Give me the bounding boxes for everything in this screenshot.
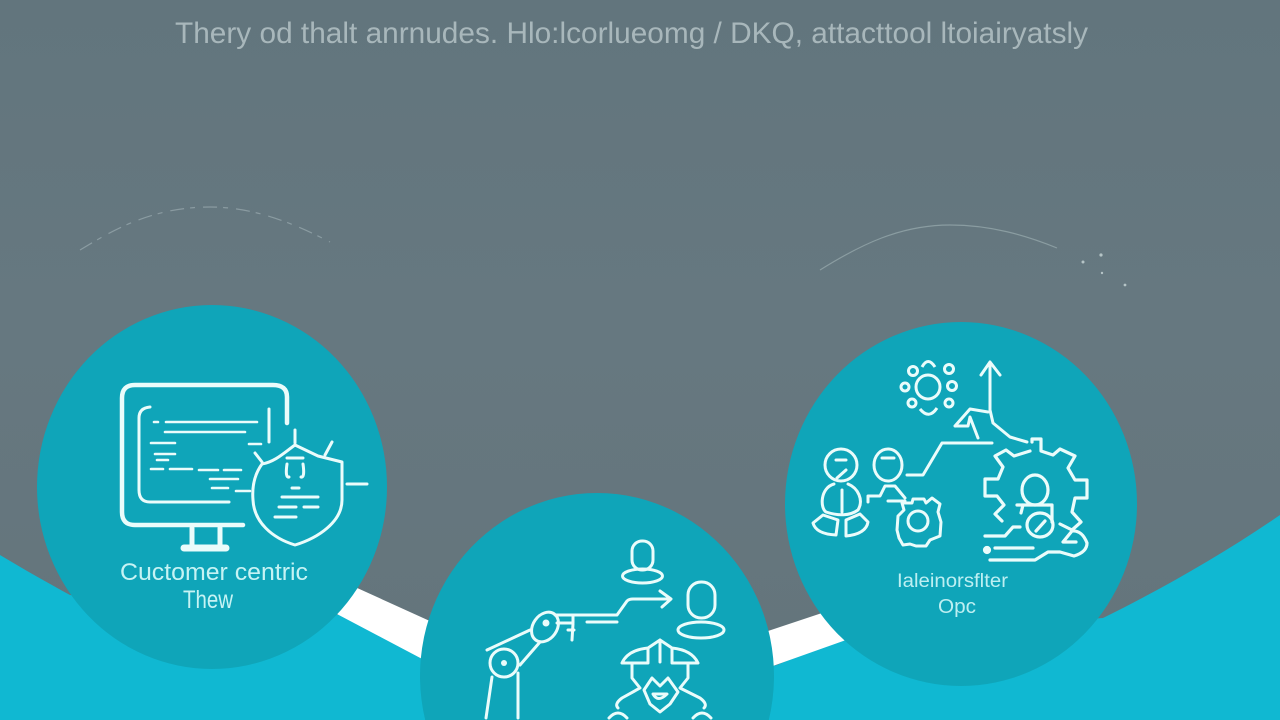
icon: small gear top bbox=[901, 362, 956, 414]
faint arc left bbox=[80, 207, 330, 250]
icon: person left bbox=[813, 449, 868, 536]
arrow: growth up bbox=[955, 362, 1027, 442]
panel: robot automation circle bbox=[420, 493, 774, 720]
panel: operations circle bbox=[785, 322, 1137, 686]
label: operations line one: Ialeinorsflter bbox=[897, 571, 1009, 592]
arrow bbox=[557, 591, 671, 622]
white ribbon right bbox=[765, 612, 846, 667]
icon: robot arm bbox=[486, 607, 574, 718]
step line bbox=[907, 443, 992, 475]
icon: large gear with person bbox=[984, 439, 1087, 560]
panel: customer centric circle bbox=[37, 305, 387, 669]
icon: person right bbox=[678, 582, 724, 638]
icon: monitor bbox=[122, 385, 287, 548]
label: thew: Thew bbox=[183, 586, 234, 614]
icon: person top bbox=[622, 541, 662, 583]
label: customer centric: Cuctomer centric bbox=[120, 559, 308, 586]
icon: shield bbox=[253, 430, 367, 545]
white ribbon left bbox=[335, 587, 432, 661]
teal wave bbox=[0, 515, 1280, 720]
label: operations line two: Opc bbox=[938, 596, 976, 618]
faint arc right with dots bbox=[820, 225, 1126, 286]
icon: person middle bbox=[868, 449, 905, 502]
icon: robot figure bbox=[609, 640, 711, 718]
icon: small gear bottom bbox=[897, 498, 941, 546]
title: Thery od thalt anrnudes. Hlo:lcorlueomg / DKQ, attacttool ltoiairyatsly bbox=[175, 17, 1088, 50]
